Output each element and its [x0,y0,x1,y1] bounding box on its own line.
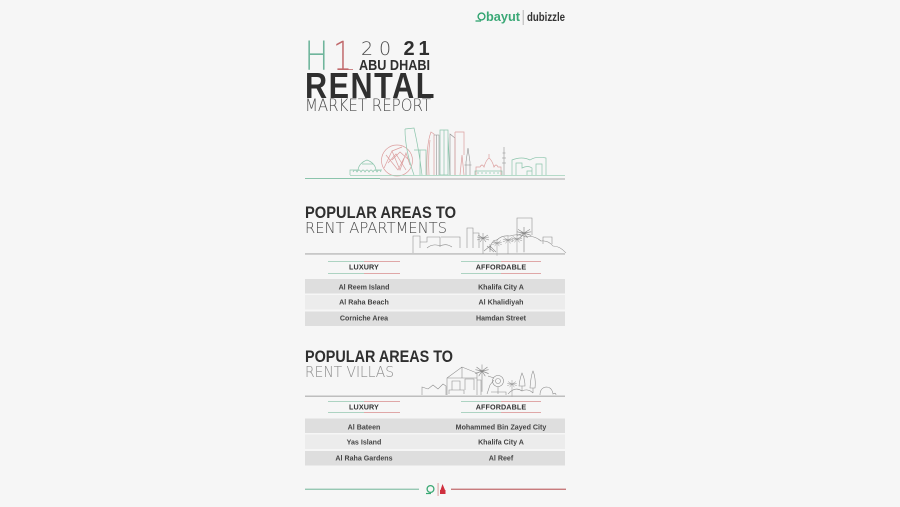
column header: luxury: LUXURY [349,402,379,412]
table: villa areas: Yas Island [347,438,381,446]
table: villa areas: Al Raha Gardens [335,454,393,462]
table: villa areas: Al Reef [489,454,514,462]
table: apartment areas: Corniche Area [340,314,388,322]
icon: dubizzle mark [440,484,446,494]
column header: affordable: AFFORDABLE [476,402,526,412]
column header: luxury [328,261,400,274]
title: Market Report: MARKET REPORT [305,96,431,115]
illustration: Abu Dhabi skyline [305,128,565,180]
column header: affordable [461,401,541,413]
heading: villas [305,348,453,381]
bayut wordmark: bayut [486,10,521,24]
title: Abu Dhabi: ABU DHABI [359,58,430,74]
title block [304,34,436,115]
illustration: apartment skyline with palms [305,218,566,256]
table: villa areas: Mohammed Bin Zayed City [456,424,546,432]
table: apartment areas: Al Reem Island [339,284,389,292]
title: 2021: 2 [404,38,415,60]
section: popular areas to rent villas [305,348,565,466]
title: 2021: 0 [379,38,391,60]
table: villa areas: Khalifa City A [478,438,524,446]
title: 2021: 2 [361,38,373,60]
column header: affordable [461,261,541,274]
title: H: H [304,34,328,80]
icon: bayut mark [426,486,434,494]
table: villa areas [305,418,565,466]
heading: villas: RENT VILLAS [305,363,394,381]
table: villa areas: Al Bateen [348,424,380,432]
column header: luxury [328,401,400,413]
heading: apartments: POPULAR AREAS TO [305,204,456,222]
title: Rental: RENTAL [305,67,436,107]
table: apartment areas: Khalifa City A [478,284,524,292]
table: apartment areas: Al Raha Beach [339,298,389,306]
section: popular areas to rent apartments [305,204,566,326]
illustration: villa and gardens [305,364,565,397]
column header: affordable: AFFORDABLE [476,262,526,272]
dubizzle wordmark: dubizzle [527,10,565,24]
column header: luxury: LUXURY [349,262,379,272]
logo: bayut and dubizzle [476,10,565,25]
logo divider [522,10,524,25]
table: apartment areas [305,279,565,326]
heading: apartments: RENT APARTMENTS [305,219,447,237]
heading: apartments [305,204,456,237]
table: apartment areas: Al Khalidiyah [479,298,523,306]
table: apartment areas: Hamdan Street [476,314,527,322]
heading: villas: POPULAR AREAS TO [305,348,453,366]
footer with logo marks [305,483,566,496]
title: 2021: 1 [418,38,430,60]
title: 1: 1 [333,34,352,80]
icon: bayut mark [476,13,485,21]
